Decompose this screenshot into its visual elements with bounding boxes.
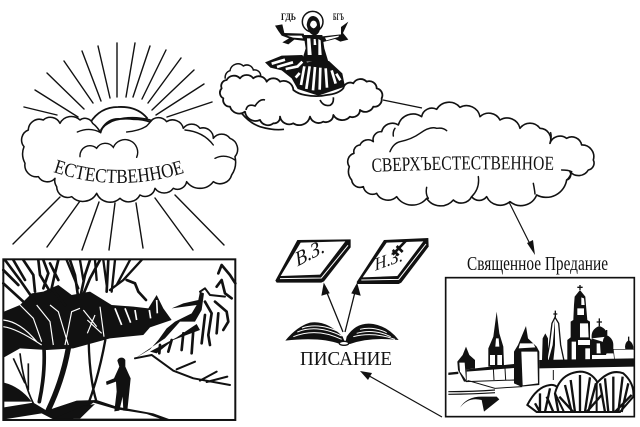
label: supernatural: СВЕРХЪЕСТЕСТВЕННОЕ bbox=[372, 156, 554, 172]
connector: God's cloud to supernatural cloud bbox=[383, 100, 422, 108]
bare tree branches bbox=[3, 260, 146, 305]
arrows: scripture to testaments bbox=[322, 284, 360, 332]
white streaks on mountains bbox=[3, 300, 157, 345]
halo bbox=[302, 11, 323, 32]
inscriptions beside the figure: БГЪ bbox=[333, 12, 344, 22]
small bush bbox=[13, 353, 33, 403]
arms and hands bbox=[275, 24, 306, 44]
picture panel: landscape bbox=[3, 259, 235, 420]
cloud: natural revelation bbox=[20, 116, 238, 203]
walking man bbox=[106, 358, 131, 411]
corner round tower bbox=[514, 326, 539, 387]
domes right bbox=[597, 318, 629, 342]
icon: cross on book bbox=[393, 240, 407, 255]
label: В.З.: В.З. bbox=[293, 235, 327, 272]
arrow: supernatural cloud to sacred tradition bbox=[509, 202, 535, 255]
spire tower left bbox=[488, 312, 504, 367]
label: Н.З.: Н.З. bbox=[372, 244, 404, 275]
monastery wall bbox=[539, 358, 634, 368]
small gate tower bbox=[457, 347, 475, 382]
inscriptions beside the figure: ГДЬ bbox=[281, 12, 296, 22]
book: New Testament bbox=[357, 238, 429, 284]
inscriptions beside the figure bbox=[281, 12, 344, 22]
book: Old Testament bbox=[275, 235, 351, 283]
divine figure with halo bbox=[265, 11, 348, 96]
arrow: tradition to scripture bbox=[360, 371, 442, 417]
cloud: God's cloud bbox=[220, 64, 382, 130]
right cliff bbox=[135, 265, 235, 385]
sun disc bbox=[90, 107, 150, 130]
dark mountains bbox=[4, 285, 172, 357]
robe bbox=[265, 55, 345, 96]
torso bbox=[302, 35, 328, 62]
bushes bbox=[527, 372, 633, 412]
ground shadows bbox=[4, 400, 170, 419]
tree trunks bbox=[39, 340, 105, 410]
sun rays below the natural cloud bbox=[13, 195, 224, 250]
face and hair bbox=[307, 16, 320, 36]
picture panel: monastery bbox=[446, 278, 634, 417]
label: scripture: ПИСАНИЕ bbox=[300, 348, 392, 370]
cloud: supernatural revelation bbox=[346, 101, 595, 207]
bridge bbox=[448, 390, 495, 394]
label: natural: ЕСТЕСТВЕННОЕ bbox=[54, 160, 184, 183]
sun rays above the natural cloud bbox=[24, 43, 212, 117]
central church and spire bbox=[553, 311, 557, 317]
bell tower bbox=[577, 285, 583, 290]
icon: open book bbox=[285, 322, 399, 345]
